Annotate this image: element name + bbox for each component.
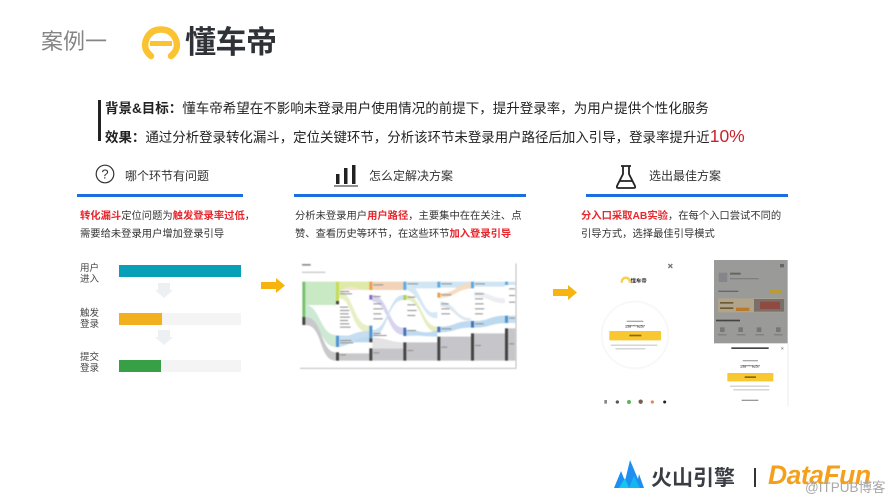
heading underline xyxy=(586,194,788,197)
logo: Volcano Engine xyxy=(614,460,735,490)
description xyxy=(295,210,522,240)
title: case one: 案例一 xyxy=(41,29,107,54)
description: 需要给未登录用户增加登录引导 xyxy=(80,229,224,240)
logo: Dongchedi xyxy=(142,25,276,60)
description: 引导方式，选择最佳引导模式 xyxy=(581,229,715,240)
funnel step: users enter: 用户 xyxy=(80,263,99,274)
icon: question mark: ? xyxy=(101,166,109,182)
screenshot: full page login: 158****6257 xyxy=(625,325,645,329)
description xyxy=(581,210,781,240)
panel: which step has a problem xyxy=(77,164,255,374)
icon: question mark xyxy=(96,164,114,184)
logo: Volcano Engine: 火山引擎 xyxy=(651,467,735,490)
watermark: @ITPUB博客 xyxy=(805,480,885,495)
accent rule beside summary xyxy=(98,100,100,141)
text: background and goal: 背景&目标：懂车帝希望在不影响未登录用户使用情况的前提下，提升登录率，为用户提供个性化服务 xyxy=(105,101,709,116)
arrow: step one to step two xyxy=(261,278,285,293)
panel: choose the best solution xyxy=(581,165,788,406)
heading: 哪个环节有问题 xyxy=(125,169,209,183)
logo: DataFun: DataFun xyxy=(768,460,870,490)
description: 赞、查看历史等环节，在这些环节加入登录引导 xyxy=(295,229,511,240)
heading underline xyxy=(294,194,526,197)
panel: how to define the solution xyxy=(294,165,526,370)
down arrow xyxy=(156,283,172,298)
description: 分入口采取AB实验，在每个入口尝试不同的 xyxy=(581,211,781,222)
login screenshots xyxy=(604,260,788,406)
funnel step: trigger login: 触发 xyxy=(80,308,99,319)
logo: Dongchedi: 懂车帝 xyxy=(185,25,276,60)
description: 分析未登录用户用户路径，主要集中在在关注、点 xyxy=(295,211,522,222)
funnel step: submit login: 提交 xyxy=(80,352,99,363)
funnel step: users enter xyxy=(80,262,241,285)
text: result: 效果：通过分析登录转化漏斗，定位关键环节，分析该环节未登录用户路径后加入引导，登录率提升近10% xyxy=(105,126,745,146)
down arrow xyxy=(156,330,172,345)
screenshot: full page login: 懂车帝 xyxy=(631,276,647,284)
heading: 选出最佳方案 xyxy=(649,169,721,183)
funnel step: submit login: 登录 xyxy=(80,363,99,374)
funnel step: users enter: 进入 xyxy=(80,274,99,285)
description xyxy=(80,210,255,240)
heading underline xyxy=(77,194,243,197)
funnel step: trigger login xyxy=(80,308,241,330)
screenshot: modal login xyxy=(714,260,788,407)
screenshot: full page login xyxy=(602,264,672,404)
sankey diagram xyxy=(300,263,517,370)
description: 转化漏斗定位问题为触发登录率过低， xyxy=(80,211,255,222)
arrow: step two to step three xyxy=(553,285,577,300)
funnel step: trigger login: 登录 xyxy=(80,319,99,330)
heading: 怎么定解决方案 xyxy=(369,169,453,183)
icon: bar chart xyxy=(334,165,358,186)
icon: flask xyxy=(616,165,636,189)
divider between logos xyxy=(754,468,756,487)
funnel chart xyxy=(80,262,241,374)
funnel step: submit login xyxy=(80,352,241,374)
screenshot: modal login: 158****6257 xyxy=(740,365,760,369)
